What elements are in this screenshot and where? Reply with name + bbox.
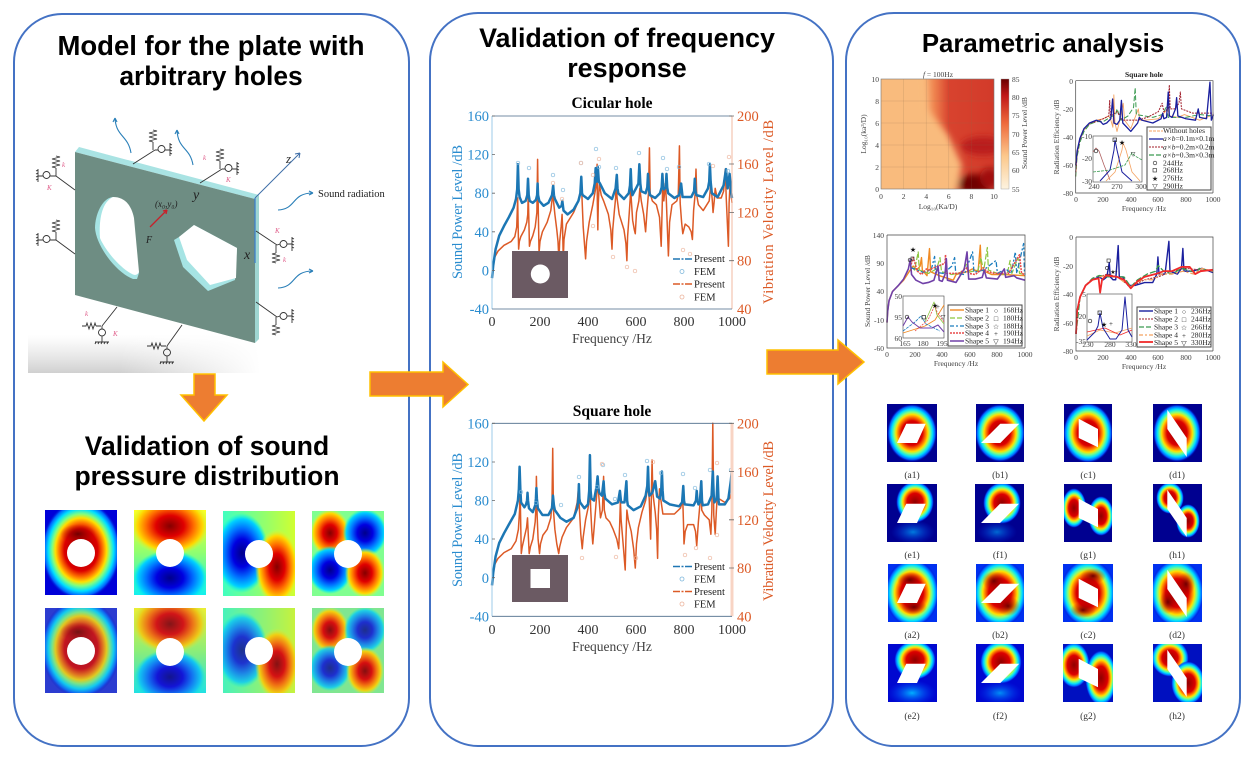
heat map row: present method <box>41 496 387 606</box>
chart: circular hole frequency response <box>450 95 777 346</box>
labels a1-d1: (c1) <box>1080 470 1096 481</box>
chart: sound power level contour map: Log₁₀(Ka/D) <box>919 202 958 211</box>
axes: 600 <box>626 315 646 330</box>
chart: sound power level, hole shapes: 1000 <box>1018 350 1033 359</box>
chart: radiation efficiency, hole shapes: Frequency /Hz <box>1122 362 1167 371</box>
axes: 600 <box>626 623 646 638</box>
legend: + <box>1182 332 1186 340</box>
inset: 300 <box>1135 182 1147 191</box>
arrow: down to sound pressure validation <box>181 374 227 421</box>
chart: sound power level, hole shapes: 90 <box>876 259 884 268</box>
axes: 400 <box>578 315 598 330</box>
legend: 236Hz <box>1191 306 1212 316</box>
legend: ☆ <box>993 323 999 331</box>
inset: 50 <box>894 292 902 301</box>
diagram: plate with arbitrary holes and elastic supports: k <box>283 256 287 264</box>
inset: plate with square hole <box>512 555 568 602</box>
chart: circular hole frequency response: Cicular hole <box>571 95 653 112</box>
peak markers: ★ <box>1110 269 1116 276</box>
heading: parametric analysis: Parametric analysis <box>922 30 1164 58</box>
axes: 80 <box>737 561 752 577</box>
axes: 800 <box>674 315 694 330</box>
diagram: plate with arbitrary holes and elastic supports <box>28 118 386 373</box>
chart: square hole frequency response: Square hole <box>573 403 651 420</box>
heading: validation of sound pressure: pressure distribution <box>74 461 340 491</box>
chart: sound power level, hole shapes: Sound Power Level /dB <box>863 255 872 327</box>
axes: 120 <box>737 206 759 222</box>
chart: sound power level contour map <box>859 70 1029 211</box>
chart: sound power level, hole shapes: 600 <box>964 350 976 359</box>
peak markers: ★ <box>910 246 916 254</box>
panel: model and sound pressure validation <box>14 14 409 746</box>
chart: radiation efficiency, square hole: 200 <box>1097 195 1109 204</box>
inset <box>894 292 948 348</box>
chart: sound power level contour map: 65 <box>1012 148 1020 157</box>
legend: 268Hz <box>1163 166 1184 174</box>
legend <box>948 305 1024 346</box>
peak markers: + <box>1114 270 1118 276</box>
labels e1-h1: (g1) <box>1080 550 1096 561</box>
legend: 244Hz <box>1191 314 1212 324</box>
legend: Shape 1 <box>965 306 989 314</box>
chart: sound power level, hole shapes: -10 <box>874 316 884 325</box>
heat map row: FEM <box>41 594 386 705</box>
chart: sound power level, hole shapes: 140 <box>873 231 884 240</box>
chart: radiation efficiency, square hole: -80 <box>1063 189 1073 198</box>
axes: 0 <box>488 315 496 330</box>
chart: radiation efficiency, hole shapes <box>1052 233 1221 371</box>
labels e2-h2: (e2) <box>904 711 920 722</box>
legend: Present <box>694 587 725 598</box>
labels a1-d1: (a1) <box>904 470 920 481</box>
legend: 290Hz <box>1163 182 1184 190</box>
chart: sound power level contour map: 4 <box>875 141 879 150</box>
axes: 80 <box>737 254 752 270</box>
chart: radiation efficiency, square hole: Frequency /Hz <box>1122 204 1167 213</box>
chart: radiation efficiency, square hole: -40 <box>1063 133 1073 142</box>
axes <box>450 416 777 654</box>
chart: sound power level contour map: 6 <box>875 119 879 128</box>
legend: Shape 3 <box>1154 322 1178 332</box>
axes: Vibration Velocity Level /dB <box>761 441 777 601</box>
chart: radiation efficiency, square hole: Square hole <box>1125 70 1164 79</box>
axes: 40 <box>474 225 489 241</box>
axes: 1000 <box>718 315 746 330</box>
chart: radiation efficiency, hole shapes: 1000 <box>1206 353 1221 362</box>
legend: ○ <box>994 307 998 315</box>
inset: -10 <box>1082 132 1092 141</box>
axes: 0 <box>482 571 489 587</box>
diagram: plate with arbitrary holes and elastic supports: x <box>243 248 251 263</box>
labels a2-d2: (a2) <box>904 630 920 641</box>
legend: 244Hz <box>1163 158 1184 168</box>
legend: Shape 3 <box>965 322 989 330</box>
legend: a×b=0.1m×0.1m <box>1163 134 1214 143</box>
axes: -40 <box>470 302 489 318</box>
chart: sound power level contour map: 10 <box>872 75 879 84</box>
row a2-d2 <box>885 559 1204 627</box>
inset: 280 <box>1104 340 1116 349</box>
chart: sound power level contour map: Log₁₀(ka³/D) <box>859 114 868 154</box>
chart: radiation efficiency, hole shapes: -60 <box>1063 319 1073 328</box>
panel: validation of frequency response <box>430 13 833 746</box>
axes: 200 <box>737 109 759 125</box>
legend: Shape 2 <box>965 314 989 322</box>
chart: sound power level contour map: 10 <box>990 192 998 201</box>
axes: Vibration Velocity Level /dB <box>761 120 777 304</box>
chart: sound power level contour map: 4 <box>924 192 928 201</box>
inset: -20 <box>1082 154 1092 163</box>
chart: radiation efficiency, square hole: -20 <box>1063 105 1073 114</box>
legend: 188Hz <box>1003 322 1024 330</box>
diagram: plate with arbitrary holes and elastic supports: (x₀,y₀) <box>155 199 178 209</box>
heading: validation of frequency response: Validation of frequency <box>479 23 775 53</box>
chart: sound power level contour map: 85 <box>1012 75 1020 84</box>
inset: ★ <box>1101 321 1107 329</box>
diagram: plate with arbitrary holes and elastic supports: K <box>225 176 231 184</box>
legend: FEM <box>694 292 716 304</box>
inset: 180 <box>917 339 929 348</box>
chart: radiation efficiency, square hole: -60 <box>1063 161 1073 170</box>
legend: a×b=0.2m×0.2m <box>1163 142 1214 152</box>
axes: 40 <box>737 302 752 318</box>
inset: 95 <box>894 313 902 322</box>
legend <box>1137 306 1212 348</box>
chart: radiation efficiency, hole shapes: 800 <box>1180 353 1192 362</box>
legend <box>1147 126 1215 190</box>
arrow: model to frequency response <box>370 362 468 407</box>
chart: radiation efficiency, square hole: 800 <box>1180 195 1192 204</box>
labels a1-d1: (b1) <box>992 470 1008 481</box>
chart: sound power level contour map: Sound Power Level /dB <box>1020 97 1029 169</box>
chart: radiation efficiency, hole shapes: -40 <box>1063 290 1073 299</box>
inset: 60 <box>894 334 902 343</box>
inset: ▽ <box>941 315 946 321</box>
chart: radiation efficiency, square hole: 0 <box>1069 77 1073 86</box>
axes: 160 <box>467 109 489 125</box>
axes: 0 <box>482 264 489 280</box>
chart: sound power level contour map: 0 <box>875 185 879 194</box>
legend: 266Hz <box>1191 322 1212 332</box>
legend: Shape 5 <box>965 336 989 346</box>
inset: + <box>1109 320 1113 328</box>
chart: radiation efficiency, hole shapes: 600 <box>1152 353 1164 362</box>
labels e1-h1: (h1) <box>1169 550 1185 561</box>
FEM markers <box>516 147 730 192</box>
legend: + <box>994 330 998 338</box>
axes <box>450 109 777 346</box>
heading: model for the plate: Model for the plate with <box>57 30 365 61</box>
labels e2-h2: (h2) <box>1169 711 1185 722</box>
legend: Shape 2 <box>1154 314 1178 324</box>
legend: ○ <box>1182 308 1186 316</box>
diagram: plate with arbitrary holes and elastic supports: Sound radiation <box>318 189 386 200</box>
heat map grid: hole shape modes <box>885 403 1205 722</box>
diagram: plate with arbitrary holes and elastic supports: z <box>285 151 291 166</box>
legend: a×b=0.3m×0.3m <box>1163 150 1214 160</box>
legend: 280Hz <box>1191 330 1212 340</box>
axes: 160 <box>467 416 489 432</box>
chart: radiation efficiency, hole shapes: 0 <box>1074 353 1078 362</box>
axes: -40 <box>470 610 489 626</box>
legend: Present <box>694 280 725 290</box>
inset <box>1082 132 1147 191</box>
FEM markers <box>519 459 733 507</box>
chart: radiation efficiency, hole shapes: -20 <box>1063 262 1073 271</box>
inset: 165 <box>899 339 911 348</box>
inset: 330 <box>1125 340 1137 349</box>
inset: 240 <box>1088 182 1100 191</box>
axes: 1000 <box>718 623 746 638</box>
legend: ▽ <box>993 338 999 346</box>
diagram: plate with arbitrary holes and elastic supports: k <box>203 154 207 162</box>
chart: sound power level, hole shapes: 400 <box>936 350 948 359</box>
labels e1-h1: (f1) <box>993 550 1007 561</box>
axes: Sound Power Level /dB <box>450 453 466 587</box>
chart: sound power level contour map: 55 <box>1012 185 1020 194</box>
heading: model for the plate: arbitrary holes <box>119 61 303 91</box>
heading: validation of frequency response: response <box>567 53 687 83</box>
legend: ▽ <box>1152 182 1158 190</box>
chart: sound power level, hole shapes: 0 <box>885 350 889 359</box>
axes: 0 <box>488 623 496 638</box>
diagram: plate with arbitrary holes and elastic supports: K <box>112 330 118 338</box>
legend <box>673 254 725 304</box>
diagram: plate with arbitrary holes and elastic supports: k <box>62 161 66 169</box>
axes: 120 <box>737 513 759 529</box>
legend: FEM <box>694 574 716 586</box>
peak markers <box>908 246 916 262</box>
chart: radiation efficiency, hole shapes: 0 <box>1069 233 1073 242</box>
chart: radiation efficiency, square hole: Radiation Efficiency /dB <box>1052 100 1061 174</box>
chart: sound power level contour map: 75 <box>1012 111 1020 120</box>
legend: Shape 4 <box>965 328 989 338</box>
axes: 400 <box>578 623 598 638</box>
inset: 270 <box>1111 182 1123 191</box>
inset: ★ <box>1119 139 1125 147</box>
inset: 230 <box>1082 340 1094 349</box>
legend: FEM <box>694 267 716 278</box>
inset: ★ <box>932 302 938 310</box>
chart: radiation efficiency, hole shapes: -80 <box>1063 347 1073 356</box>
row e2-h2 <box>888 639 1205 706</box>
legend: 330Hz <box>1191 338 1212 347</box>
axes: 200 <box>530 315 550 330</box>
axes: 200 <box>530 623 550 638</box>
chart: sound power level contour map: 0 <box>879 192 883 201</box>
chart: sound power level contour map: 8 <box>970 192 974 201</box>
chart: sound power level, hole shapes <box>863 231 1033 368</box>
labels e1-h1: (e1) <box>904 550 920 561</box>
chart: radiation efficiency, hole shapes: 200 <box>1097 353 1109 362</box>
row a1-d1 <box>887 403 1202 463</box>
chart: sound power level, hole shapes: 40 <box>876 287 884 296</box>
axes: 160 <box>737 157 759 173</box>
legend: Present <box>694 254 725 265</box>
legend: ☆ <box>1181 324 1187 332</box>
legend: ▽ <box>1181 340 1187 348</box>
chart: sound power level contour map: 8 <box>875 97 879 106</box>
chart: sound power level contour map: 2 <box>902 192 906 201</box>
heading: validation of sound pressure: Validation of sound <box>85 431 329 461</box>
legend: FEM <box>694 600 716 610</box>
chart: radiation efficiency, square hole <box>1052 70 1221 213</box>
labels a1-d1: (d1) <box>1169 470 1185 481</box>
vibration FEM markers <box>551 155 731 273</box>
axes: 40 <box>737 610 752 626</box>
chart: radiation efficiency, hole shapes: 400 <box>1125 353 1137 362</box>
axes: 800 <box>674 623 694 638</box>
axes: 40 <box>474 532 489 548</box>
labels a2-d2: (c2) <box>1080 630 1096 641</box>
legend: 194Hz <box>1003 336 1024 346</box>
chart: radiation efficiency, square hole: 400 <box>1125 195 1137 204</box>
legend: 168Hz <box>1003 306 1024 314</box>
inset: ▽ <box>1131 152 1136 158</box>
legend: □ <box>1182 316 1187 324</box>
axes: 160 <box>737 465 759 481</box>
inset: + <box>936 303 940 311</box>
peak markers <box>1105 259 1118 276</box>
chart: sound power level, hole shapes: 200 <box>909 350 921 359</box>
chart: radiation efficiency, hole shapes: Radiation Efficiency /dB <box>1052 257 1061 331</box>
legend: Present <box>694 562 725 573</box>
inset: -20 <box>1076 312 1086 321</box>
legend: Without holes <box>1163 126 1205 135</box>
inset: -30 <box>1082 177 1092 186</box>
axes: 120 <box>467 455 489 471</box>
axes: Sound Power Level /dB <box>450 145 466 279</box>
arrow: frequency response to parametric analysis <box>767 340 864 384</box>
legend: ★ <box>1152 175 1158 183</box>
inset <box>1076 290 1137 349</box>
axes: Frequency /Hz <box>572 331 652 346</box>
diagram: plate with arbitrary holes and elastic supports: k <box>85 310 89 318</box>
diagram: plate with arbitrary holes and elastic supports: y <box>191 188 200 203</box>
labels a2-d2: (b2) <box>992 630 1008 641</box>
chart: sound power level contour map: 60 <box>1012 166 1020 175</box>
vibration FEM markers <box>580 460 719 560</box>
chart: radiation efficiency, square hole: 0 <box>1074 195 1078 204</box>
labels e2-h2: (g2) <box>1080 711 1096 722</box>
legend: Shape 1 <box>1154 306 1178 316</box>
axes: Frequency /Hz <box>572 639 652 654</box>
axes: 80 <box>474 186 489 202</box>
labels e2-h2: (f2) <box>993 711 1007 722</box>
chart: sound power level, hole shapes: -60 <box>874 344 884 353</box>
legend: □ <box>994 315 999 323</box>
diagram: plate with arbitrary holes and elastic supports: F <box>145 235 153 246</box>
labels a2-d2: (d2) <box>1169 630 1185 641</box>
chart: radiation efficiency, square hole: 1000 <box>1206 195 1221 204</box>
chart: sound power level, hole shapes: 800 <box>991 350 1003 359</box>
diagram: plate with arbitrary holes and elastic supports: K <box>46 184 52 192</box>
chart: radiation efficiency, square hole: 600 <box>1152 195 1164 204</box>
inset: -35 <box>1076 337 1086 346</box>
chart: sound power level contour map: 80 <box>1012 93 1020 102</box>
legend: Shape 4 <box>1154 330 1178 340</box>
legend: 190Hz <box>1003 328 1024 338</box>
legend: Shape 5 <box>1154 338 1178 347</box>
axes: 200 <box>737 416 759 432</box>
chart: sound power level contour map: f = 100Hz <box>923 70 954 79</box>
row e1-h1 <box>887 481 1202 544</box>
panel: parametric analysis <box>846 13 1240 746</box>
chart: sound power level contour map: 70 <box>1012 130 1020 139</box>
legend: 276Hz <box>1163 174 1184 182</box>
chart: sound power level, hole shapes: Frequency /Hz <box>934 359 979 368</box>
diagram: plate with arbitrary holes and elastic supports: K <box>274 227 280 235</box>
chart: sound power level contour map: 2 <box>875 163 879 172</box>
legend: 180Hz <box>1003 314 1024 322</box>
inset: plate with circular hole <box>512 251 568 298</box>
chart: sound power level contour map: 6 <box>947 192 951 201</box>
inset: 5 <box>1082 290 1086 299</box>
axes: 120 <box>467 148 489 164</box>
chart: square hole frequency response <box>450 403 777 654</box>
inset: 195 <box>936 339 948 348</box>
heat maps: sound pressure distribution <box>41 496 387 705</box>
legend <box>673 562 725 610</box>
axes: 80 <box>474 494 489 510</box>
